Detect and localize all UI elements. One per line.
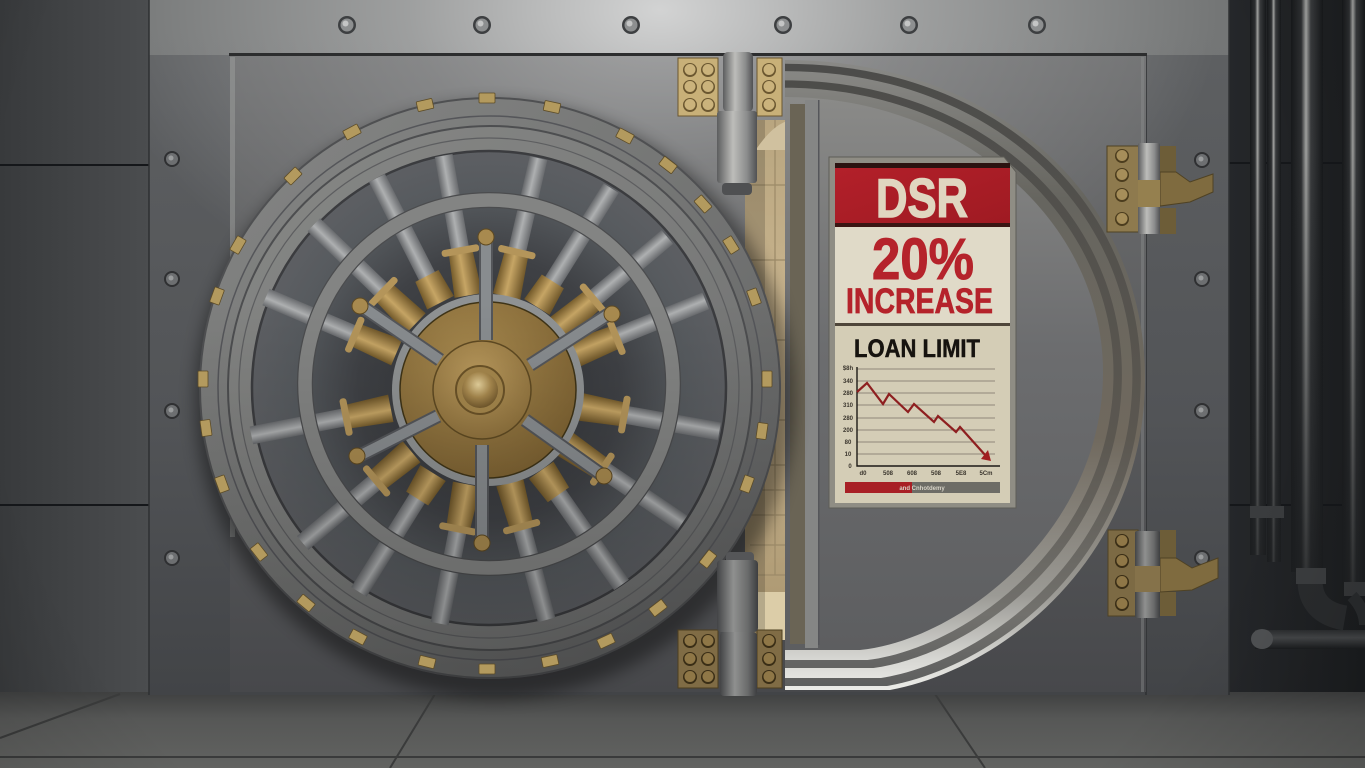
chart: falling loan limit: 0	[848, 464, 852, 470]
chart: falling loan limit: 5Cm	[979, 471, 993, 477]
chart: falling loan limit	[843, 366, 1000, 477]
six handle spokes	[349, 229, 620, 551]
poster: DSR 20% increase, loan limit	[829, 157, 1016, 508]
chart footer bar: and Cnhotdemy	[899, 486, 945, 492]
floor	[0, 692, 1365, 768]
open vault interior: brick wall	[745, 120, 810, 640]
chart footer bar	[845, 482, 1000, 493]
brass hub plate	[392, 294, 584, 486]
chart: falling loan limit: 608	[907, 471, 918, 477]
heading: 20%: 20%	[872, 227, 974, 292]
chart: falling loan limit: 5E8	[956, 471, 967, 477]
chart: falling loan limit: 310	[843, 403, 854, 409]
chart: falling loan limit: 10	[845, 452, 852, 458]
right lower hinge	[1108, 530, 1218, 618]
chart: falling loan limit: $8h	[843, 366, 854, 372]
bottom centre hinge	[678, 552, 782, 696]
chart: falling loan limit: 200	[843, 428, 854, 434]
chart: falling loan limit: 80	[845, 440, 852, 446]
vault wheel door	[198, 93, 781, 679]
heading: DSR: DSR	[876, 167, 968, 229]
steel door frame	[149, 0, 1229, 695]
top centre hinge	[678, 52, 782, 195]
middle ring	[305, 200, 673, 568]
chart: falling loan limit: 508	[931, 471, 942, 477]
open round door with curved banded edge	[785, 60, 1145, 690]
chart: falling loan limit: 280	[843, 391, 854, 397]
heading: increase: INCREASE	[846, 282, 993, 321]
central brass knob	[433, 341, 531, 439]
right upper hinge	[1107, 143, 1213, 234]
frame rivets	[164, 16, 1210, 566]
radial locking bolts	[248, 152, 723, 627]
recessed door panel	[229, 53, 1147, 692]
wheel inner well	[252, 151, 726, 625]
chart: falling loan limit: 280	[843, 416, 854, 422]
chart: falling loan limit: d0	[859, 471, 867, 477]
heading: loan limit: LOAN LIMIT	[854, 335, 980, 363]
brass edge lugs	[198, 93, 772, 674]
chart: falling loan limit: 508	[883, 471, 894, 477]
round door face	[785, 97, 1103, 650]
wall pipes	[1250, 0, 1365, 649]
chart: falling loan limit: 340	[843, 379, 854, 385]
wheel drop shadow	[195, 102, 795, 698]
